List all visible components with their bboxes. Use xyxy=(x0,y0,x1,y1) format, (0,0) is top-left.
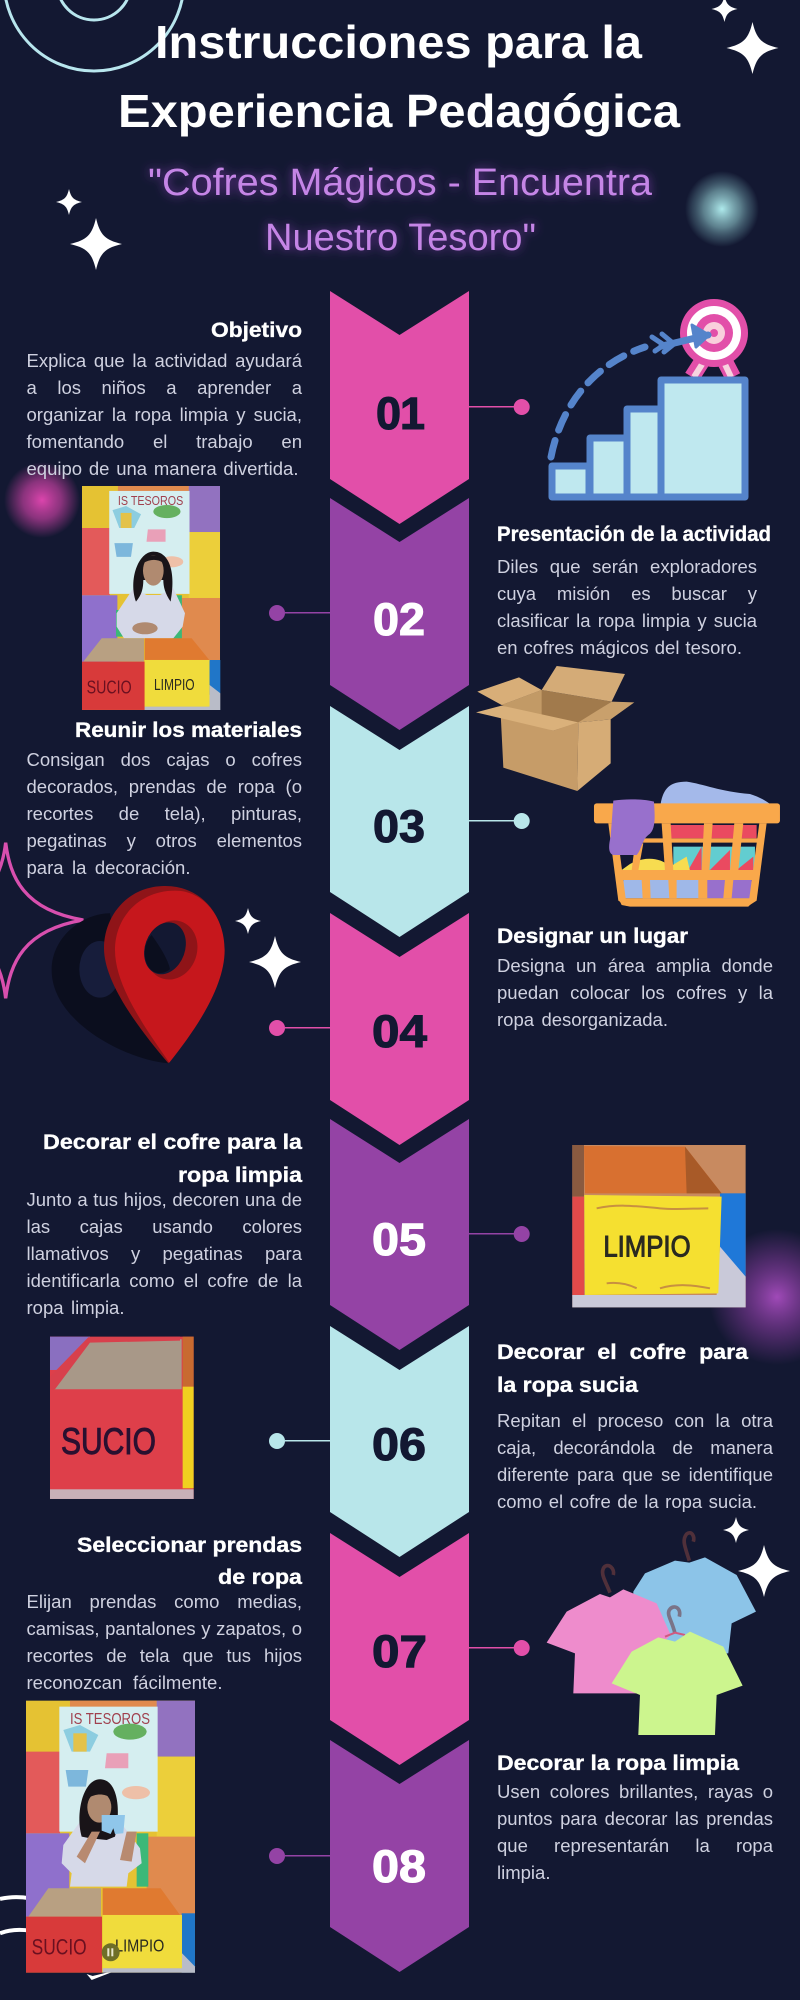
boxes xyxy=(28,1888,101,1917)
decoration: white swooshes xyxy=(0,1897,113,1980)
icon: stairs with target xyxy=(551,299,748,497)
photo: teacher with boxes (top): IS TESOROS xyxy=(118,494,183,508)
text: seleccionar prendas: reconozcan fácilmente. xyxy=(26,1672,222,1693)
text: presentación: cuya misión es buscar y xyxy=(497,583,757,604)
text: decorar cofre limpia: las cajas usando colores xyxy=(26,1216,302,1237)
heading: designar: Designar un lugar xyxy=(497,925,688,948)
chevron 04 xyxy=(330,913,469,1145)
connector 03 xyxy=(469,813,530,829)
chevron 07: 07 xyxy=(372,1626,427,1677)
text: decorar cofre sucia xyxy=(497,1410,774,1512)
icon: map pin xyxy=(52,886,225,1063)
photo: teacher with boxes (bottom): LIMPIO xyxy=(115,1936,164,1956)
heading: seleccionar prendas xyxy=(77,1534,302,1589)
heading: decorar cofre ropa limpia: ropa limpia xyxy=(178,1164,302,1187)
decoration: sparkles left of subtitle xyxy=(56,189,122,270)
pause button xyxy=(102,1943,120,1961)
text: objetivo: a los niños a aprender a xyxy=(26,377,302,398)
text: seleccionar prendas xyxy=(26,1591,302,1693)
pin shadow xyxy=(52,913,168,1063)
steps xyxy=(552,380,745,497)
text: decorar cofre sucia: Repitan el proceso con la otra xyxy=(497,1410,773,1431)
text: objetivo: fomentando el trabajo en xyxy=(26,431,302,452)
title: Instrucciones para la xyxy=(155,16,642,68)
heading: presentación: Presentación de la actividad xyxy=(497,523,771,546)
text: decorar cofre sucia: como el cofre de la ropa sucia. xyxy=(497,1491,757,1512)
text: decorar ropa limpia: limpia. xyxy=(497,1862,550,1883)
decoration: pink outlined star xyxy=(0,843,83,998)
text: objetivo: equipo de una manera divertida. xyxy=(26,458,298,479)
photo: sucio box: SUCIO xyxy=(61,1421,156,1462)
connector 01 xyxy=(469,399,530,415)
heading: seleccionar prendas: Seleccionar prendas xyxy=(77,1534,302,1557)
lattice xyxy=(608,823,767,907)
connector 04 xyxy=(269,1020,330,1036)
subtitle xyxy=(148,162,653,259)
person xyxy=(62,1822,142,1887)
text: designar xyxy=(497,955,774,1030)
chevron 06: 06 xyxy=(372,1419,426,1470)
photo: teacher with boxes (top): SUCIO xyxy=(87,676,132,697)
text: decorar ropa limpia: que representarán la ropa xyxy=(497,1835,773,1856)
text: decorar cofre limpia: Junto a tus hijos, decoren una de xyxy=(26,1189,302,1210)
title xyxy=(118,16,680,137)
text: reunir: pegatinas y otros elementos xyxy=(26,830,302,851)
text: presentación: Diles que serán exploradores xyxy=(497,556,757,577)
connector 05 xyxy=(469,1226,530,1242)
chevron 08 xyxy=(330,1740,469,1972)
photo: sucio box xyxy=(50,1337,194,1499)
text: seleccionar prendas: recortes de tela que tus hijos xyxy=(26,1645,302,1666)
chevron 02: 02 xyxy=(373,594,425,645)
photo: limpio box xyxy=(572,1145,746,1307)
green shirt xyxy=(669,1607,680,1633)
text: decorar ropa limpia: puntos para decorar las prendas xyxy=(497,1808,773,1829)
chevron 04: 04 xyxy=(372,1006,427,1057)
subtitle: "Cofres Mágicos - Encuentra xyxy=(148,162,653,204)
text: decorar cofre sucia: diferente para que se identifique xyxy=(497,1464,773,1485)
chevron 06 xyxy=(330,1326,469,1557)
chevron 01: 01 xyxy=(376,388,425,439)
text: designar: Designa un área amplia donde xyxy=(497,955,773,976)
text: seleccionar prendas: Elijan prendas como medias, xyxy=(26,1591,302,1612)
chevron 01 xyxy=(330,291,469,524)
clothes xyxy=(622,825,757,898)
text: designar: puedan colocar los cofres y la xyxy=(497,982,773,1003)
text: reunir: decorados, prendas de ropa (o xyxy=(26,776,302,797)
photo: teacher with boxes (top): LIMPIO xyxy=(154,677,195,694)
text: presentación: en cofres mágicos del tesoro. xyxy=(497,637,742,658)
chevron 03: 03 xyxy=(373,801,425,852)
text: presentación: clasificar la ropa limpia y sucia xyxy=(497,610,757,631)
text: decorar cofre sucia: caja, decorándola de manera xyxy=(497,1437,773,1458)
text: objetivo xyxy=(26,350,302,479)
subtitle: Nuestro Tesoro" xyxy=(265,217,536,259)
connector 07 xyxy=(469,1640,530,1656)
text: decorar cofre limpia: ropa limpia. xyxy=(26,1297,124,1318)
chevron 02 xyxy=(330,498,469,730)
icon: t-shirts on hangers xyxy=(547,1533,756,1735)
heading: decorar ropa limpia: Decorar la ropa limpia xyxy=(497,1752,739,1775)
heading: decorar cofre ropa sucia xyxy=(497,1341,748,1397)
text: presentación xyxy=(497,556,758,658)
chevron 05 xyxy=(330,1119,469,1350)
text: reunir: Consigan dos cajas o cofres xyxy=(26,749,302,770)
photo: limpio box: LIMPIO xyxy=(603,1231,691,1264)
text: reunir: para la decoración. xyxy=(26,857,190,878)
title: Experiencia Pedagógica xyxy=(118,85,680,137)
icon: laundry basket xyxy=(594,782,780,907)
text: reunir xyxy=(26,749,302,878)
text: decorar cofre limpia: llamativos y pegatinas para xyxy=(26,1243,302,1264)
purple cloth xyxy=(609,799,655,855)
person xyxy=(116,610,126,637)
target legs xyxy=(692,352,733,377)
heading: seleccionar prendas: de ropa xyxy=(218,1566,302,1589)
pin hole xyxy=(138,914,205,986)
heading: decorar cofre ropa limpia xyxy=(43,1131,302,1187)
text: objetivo: Explica que la actividad ayudará xyxy=(26,350,302,371)
connector 02 xyxy=(269,605,330,621)
text: reunir: recortes de tela), pinturas, xyxy=(26,803,302,824)
heading: objetivo: Objetivo xyxy=(211,319,302,342)
text: decorar cofre limpia xyxy=(26,1189,302,1318)
blue cloth xyxy=(661,782,770,804)
text: designar: ropa desorganizada. xyxy=(497,1009,668,1030)
text: decorar cofre limpia: identificarla como el cofre de la xyxy=(26,1270,302,1291)
chevron 05: 05 xyxy=(372,1214,426,1265)
decoration: sparkles top of shirts xyxy=(723,1517,790,1597)
photo: teacher with boxes (top) xyxy=(82,486,220,710)
pin front xyxy=(115,891,225,1063)
blue shirt xyxy=(684,1533,694,1561)
text: seleccionar prendas: camisas, pantalones y zapatos, o xyxy=(26,1618,302,1639)
connector 06 xyxy=(269,1433,330,1449)
heading: decorar cofre ropa sucia: la ropa sucia xyxy=(497,1374,638,1397)
rim xyxy=(594,803,780,823)
heading: reunir: Reunir los materiales xyxy=(75,719,302,742)
heading: decorar cofre ropa limpia: Decorar el cofre para la xyxy=(43,1131,302,1154)
pin back xyxy=(104,886,224,1063)
decoration: purple glow xyxy=(709,1229,800,1365)
text: objetivo: organizar la ropa limpia y sucia, xyxy=(26,404,302,425)
dashed flight path xyxy=(551,347,645,457)
decoration: cyan glow xyxy=(685,171,759,247)
connector 08 xyxy=(269,1848,330,1864)
photo: teacher with boxes (bottom): SUCIO xyxy=(32,1934,87,1959)
decoration: sparkles beside pin xyxy=(235,908,301,988)
chevron 07 xyxy=(330,1533,469,1765)
decoration: sparkles top right xyxy=(712,0,778,74)
chevron 03 xyxy=(330,706,469,937)
heading: decorar cofre ropa sucia: Decorar el cofre para xyxy=(497,1341,748,1364)
pink shirt xyxy=(603,1566,614,1593)
icon: cardboard box xyxy=(476,666,634,791)
photo: teacher with boxes (bottom): IS TESOROS xyxy=(70,1711,150,1728)
photo: teacher with boxes (bottom) xyxy=(26,1701,195,1973)
decoration: pink glow xyxy=(4,462,80,538)
decoration: concentric circles xyxy=(4,0,184,71)
text: decorar ropa limpia: Usen colores brillantes, rayas o xyxy=(497,1781,773,1802)
boxes xyxy=(83,638,144,662)
text: decorar ropa limpia xyxy=(497,1781,774,1883)
chevron 08: 08 xyxy=(372,1841,426,1892)
